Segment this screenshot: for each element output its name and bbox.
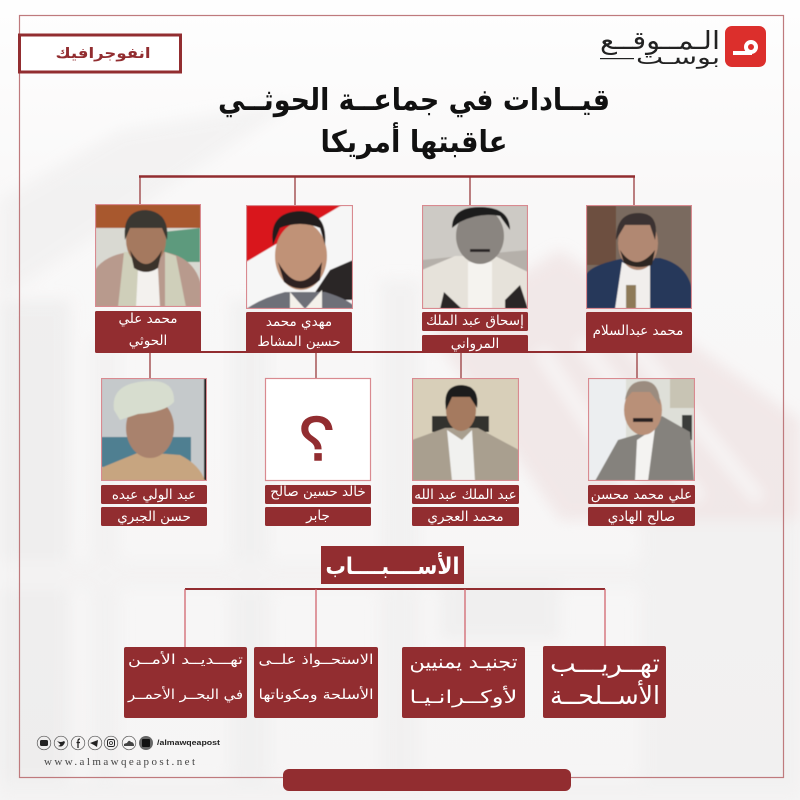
social handle: /almawqeapost xyxy=(157,738,221,747)
cause: acquiring weapons and components: الاستحــواذ علــى xyxy=(258,652,374,668)
icon: question mark: ? xyxy=(300,405,334,474)
name label: second line xyxy=(412,507,519,526)
logo wordmark xyxy=(600,26,720,69)
icon: facebook xyxy=(71,736,85,750)
photo xyxy=(101,378,207,481)
panel: Khaled Jaber xyxy=(265,378,371,526)
photo xyxy=(422,205,528,309)
title: عاقبتها أمريكا xyxy=(320,122,508,160)
cause: threatening Red Sea security xyxy=(124,647,247,718)
logo wordmark: بوسـت xyxy=(636,45,720,69)
cause: threatening Red Sea security: في البحــر الأحمــر xyxy=(127,686,243,703)
title: قيــادات في جماعــة الحوثــي xyxy=(218,83,610,118)
name label: مهدي محمد xyxy=(266,314,332,330)
name label: first line: عبد الملك عبد الله xyxy=(414,487,517,503)
cause: smuggling weapons: تهــريـــب xyxy=(550,649,660,679)
heading: causes: الأســــبــــاب xyxy=(326,551,460,580)
name label: second line: جابر xyxy=(305,508,330,524)
panel: Abdulmalik al-Ajri xyxy=(412,378,519,526)
cause: threatening Red Sea security: تهـــديــد الأمــن xyxy=(128,651,243,668)
name label: second line: صالح الهادي xyxy=(608,509,675,525)
panel: Mahdi al-Mashat xyxy=(246,205,353,353)
name label: second line xyxy=(265,507,371,526)
name label xyxy=(246,312,352,353)
icon: twitter xyxy=(54,736,68,750)
icon: logo mark xyxy=(725,26,766,67)
name label: first line: علي محمد محسن xyxy=(591,487,692,503)
panel: Mohammed Abdulsalam xyxy=(586,205,692,353)
photo xyxy=(246,205,353,309)
connector: top row tree xyxy=(139,176,635,205)
cause: acquiring weapons and components: الأسلحة ومكوناتها xyxy=(258,686,374,703)
cause: acquiring weapons and components xyxy=(254,647,378,718)
cause: recruiting Yemenis for Ukraine: تجنيـد يمنيين xyxy=(410,652,518,673)
name label: first line: خالد حسين صالح xyxy=(270,484,366,500)
bottom bar xyxy=(283,769,571,791)
cause: smuggling weapons xyxy=(543,646,666,718)
name label: first line: عبد الولي عبده xyxy=(112,487,196,503)
name label xyxy=(586,312,692,353)
icon: youtube xyxy=(37,736,51,750)
website address: www.almawqeapost.net xyxy=(44,756,195,768)
connector: causes tree xyxy=(185,589,605,654)
icon: instagram xyxy=(104,736,118,750)
name label: second line: المرواني xyxy=(451,336,499,352)
name label: محمد علي xyxy=(119,311,177,327)
name label: second line xyxy=(422,335,528,353)
panel: Abdulwali al-Jabri xyxy=(101,378,207,526)
name label: second line xyxy=(588,507,695,526)
name label: محمد عبدالسلام xyxy=(593,323,683,339)
cause: recruiting Yemenis for Ukraine xyxy=(402,647,525,718)
panel: Mohammed Ali al-Houthi xyxy=(95,204,201,353)
panel: Ali al-Hadi xyxy=(588,378,695,526)
name label: second line xyxy=(101,507,207,526)
cause: smuggling weapons: الأســلحــة xyxy=(550,679,660,710)
connector: between rows xyxy=(150,352,637,378)
category tag: انفوجرافيك xyxy=(56,46,150,62)
name label: second line: محمد العجري xyxy=(427,509,504,525)
icon: telegram xyxy=(88,736,102,750)
name label xyxy=(95,311,201,353)
logo wordmark: الـمــوقــع xyxy=(600,26,720,56)
name label: first line xyxy=(101,485,207,504)
heading: causes xyxy=(321,546,464,584)
photo xyxy=(588,378,695,481)
icon: soundcloud xyxy=(122,736,136,750)
cause: recruiting Yemenis for Ukraine: لأوكــرانـيـا xyxy=(410,686,518,708)
title xyxy=(218,83,610,160)
name label: حسين المشاط xyxy=(257,334,341,350)
icon: website xyxy=(139,736,153,750)
photo xyxy=(412,378,519,481)
category tag xyxy=(20,35,180,72)
name label: first line: إسحاق عبد الملك xyxy=(426,313,524,329)
name label: second line: حسن الجبري xyxy=(117,509,191,525)
name label: الحوثي xyxy=(129,333,167,349)
photo xyxy=(95,204,201,307)
panel: Ishaq al-Marwani xyxy=(422,205,528,353)
photo xyxy=(586,205,692,309)
social icons row xyxy=(37,736,153,750)
photo placeholder xyxy=(266,378,370,480)
logo xyxy=(600,26,766,69)
